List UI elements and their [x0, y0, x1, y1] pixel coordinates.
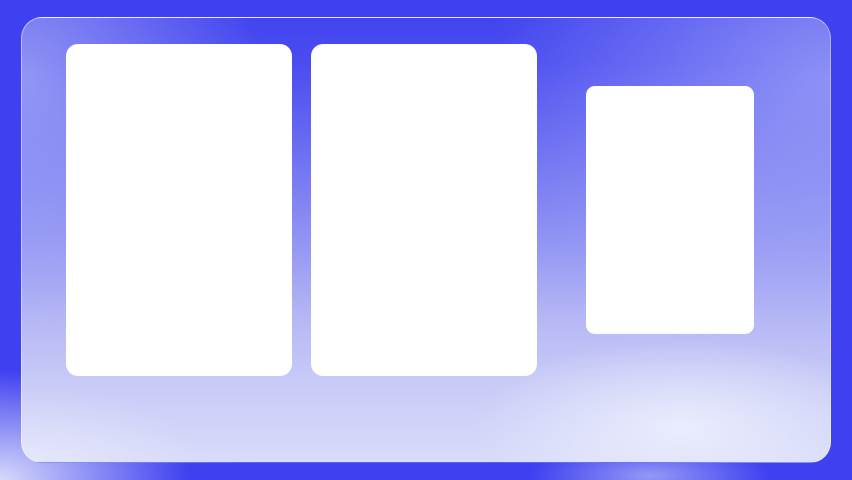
card: left white card [66, 44, 292, 376]
card: right small white card [586, 86, 754, 334]
card: middle white card [311, 44, 537, 376]
